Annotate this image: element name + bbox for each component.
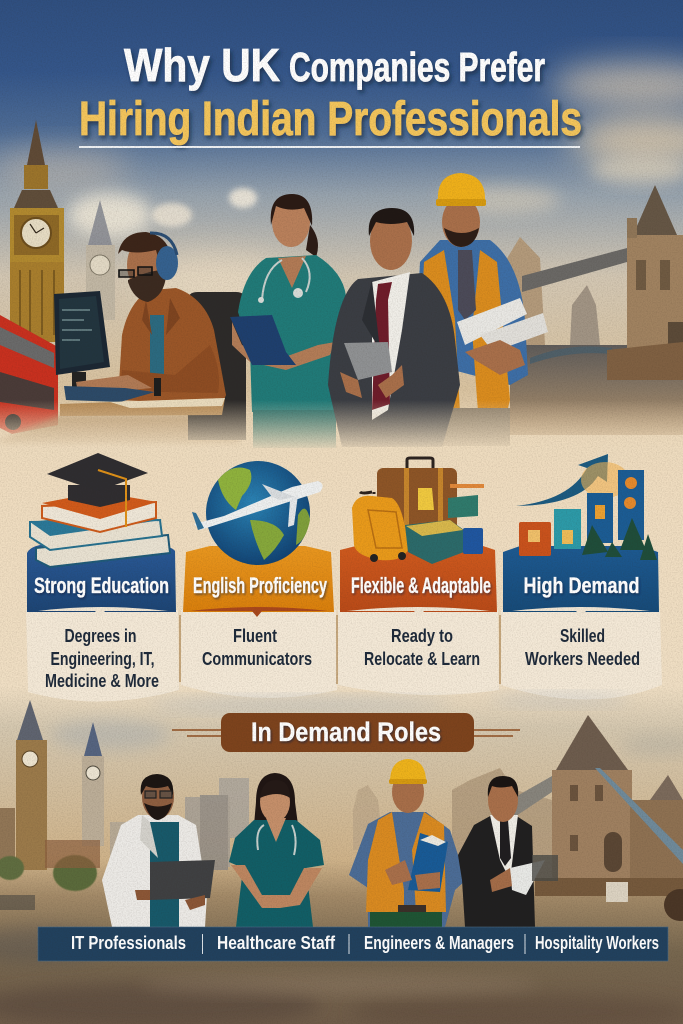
- figure: businessman with tablet: [328, 208, 460, 447]
- pill: [221, 713, 474, 752]
- panel: High Demand: [501, 454, 662, 700]
- figure: engineer with folder: [349, 759, 466, 927]
- decorative connector lines: [172, 730, 520, 736]
- heading: Strong Education: [34, 573, 169, 598]
- icon: books and graduation cap: [30, 453, 170, 567]
- clouds: lower sky: [50, 694, 683, 755]
- label: In Demand Roles: [251, 717, 441, 747]
- role labels: [71, 932, 659, 953]
- heading: Flexible & Adaptable: [351, 573, 491, 598]
- body card: [181, 610, 337, 698]
- landmark: Tower Bridge (top): [503, 185, 683, 435]
- description: Engineering, IT,: [50, 649, 154, 669]
- figure: hospitality worker: [458, 776, 558, 927]
- title line 1: Why UK: [124, 39, 280, 91]
- description: Skilled: [560, 626, 605, 646]
- title line 2: Hiring Indian Professionals: [79, 93, 582, 146]
- icon: luggage: [352, 458, 484, 564]
- roles bar: [38, 927, 668, 961]
- description: Degrees in: [64, 626, 136, 646]
- figure: engineer with blueprints: [415, 173, 548, 446]
- description: Ready to: [391, 626, 453, 646]
- dividers: [202, 934, 525, 954]
- title line 1: Companies Prefer: [289, 44, 545, 90]
- header ribbon: [27, 545, 176, 612]
- landmark: distant clock tower: [86, 200, 115, 320]
- header ribbon: [183, 546, 334, 612]
- header ribbon: [340, 545, 497, 612]
- description: [202, 626, 312, 669]
- heading: In Demand Roles: [172, 713, 520, 752]
- vehicle: red double-decker bus: [0, 315, 58, 434]
- panel: Strong Education: [26, 453, 179, 702]
- cream fade into benefits section: [0, 400, 683, 460]
- icon: globe with plane: [192, 461, 323, 565]
- ground texture patches: [0, 927, 683, 1024]
- title: [79, 39, 582, 148]
- trees and road edge: [0, 840, 100, 910]
- figure: IT professional with laptop: [102, 774, 215, 927]
- title underline: [79, 146, 580, 148]
- description: Relocate & Learn: [364, 649, 480, 669]
- panel dividers: [180, 615, 500, 684]
- role labels: Healthcare Staff: [217, 932, 336, 953]
- description: Fluent: [233, 626, 277, 646]
- figure: nurse with clipboard: [230, 194, 346, 448]
- landmark: Big Ben (top): [10, 120, 64, 342]
- role labels: Engineers & Managers: [364, 932, 514, 953]
- body card: [338, 610, 499, 695]
- landmark: skyline (bottom): [110, 778, 384, 870]
- clouds: upper sky: [0, 63, 683, 315]
- heading: English Proficiency: [193, 573, 327, 598]
- figure: IT professional at desk: [54, 232, 246, 440]
- description: [45, 626, 159, 691]
- header ribbon: [503, 546, 659, 612]
- description: [364, 626, 480, 669]
- figure: healthcare worker: [229, 773, 324, 927]
- body card: [26, 610, 179, 702]
- panel: English Proficiency: [181, 461, 337, 698]
- title line 1: [124, 39, 545, 91]
- panel: Flexible & Adaptable: [338, 458, 499, 695]
- icon: rising bars and arrow: [516, 454, 657, 560]
- bar background: [38, 927, 668, 961]
- description: Communicators: [202, 649, 312, 669]
- description: [525, 626, 640, 669]
- description: Medicine & More: [45, 671, 159, 691]
- body card: [501, 610, 662, 700]
- landmark: Tower Bridge (bottom): [452, 715, 683, 921]
- role labels: IT Professionals: [71, 932, 186, 953]
- heading: High Demand: [524, 573, 640, 598]
- landmark: second clock tower (bottom): [82, 722, 104, 846]
- landmark: Big Ben (bottom): [0, 700, 47, 870]
- description: Workers Needed: [525, 649, 640, 669]
- road under desk: [0, 415, 240, 445]
